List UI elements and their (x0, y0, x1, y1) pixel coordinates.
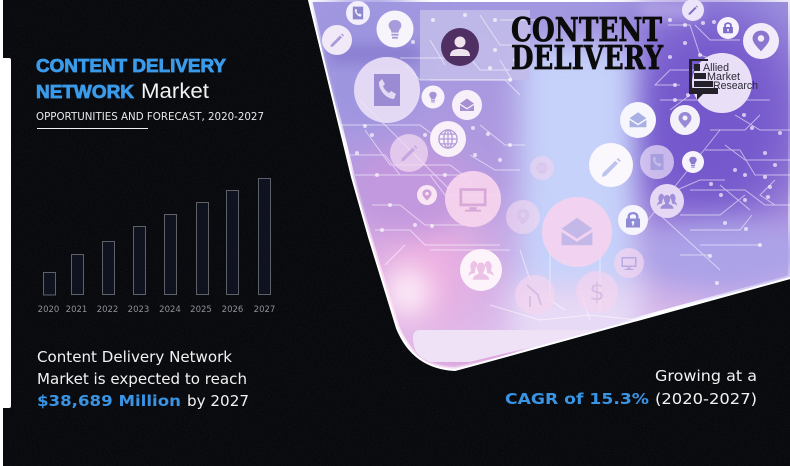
bar chart: 2026 (222, 305, 243, 315)
icon: pencil large white (589, 143, 633, 187)
icon: pencil top right (682, 0, 704, 21)
icon: globe behind logo (692, 53, 752, 113)
icon: envelope (452, 90, 482, 120)
market size callout (37, 348, 249, 410)
logo: Allied Market Research: Allied (703, 62, 729, 74)
tablet (413, 330, 600, 362)
icon: envelope large (542, 197, 612, 267)
icon: user (441, 28, 479, 66)
icon: globe (430, 121, 466, 157)
icon: pin right (670, 105, 700, 135)
icon: pin top right (743, 23, 779, 59)
photo heading: content delivery: CONTENT (511, 10, 662, 49)
circuit nodes (355, 13, 782, 285)
bar chart: 2024 (159, 305, 181, 315)
icon: chart faded (515, 275, 555, 315)
icon: envelope right (620, 102, 656, 138)
icon: people right (650, 184, 684, 218)
market size callout: Content Delivery Network (37, 348, 232, 366)
hero photo panel (310, 0, 790, 369)
white left edge strip (0, 0, 11, 466)
icon: phone small (346, 1, 370, 25)
photo colour washes (310, 0, 790, 365)
bar chart: 2025 (190, 305, 212, 315)
icon: monitor faded (614, 248, 644, 278)
market size callout: $38,689 Million (37, 392, 181, 410)
icon: bulb right (682, 151, 704, 173)
icon: pin faded (506, 200, 540, 234)
title (36, 56, 226, 103)
CAGR callout: (2020-2027) (655, 390, 757, 408)
title: NETWORK (36, 82, 134, 102)
market size callout: Market is expected to reach (37, 370, 247, 388)
icon: phone book (354, 57, 420, 123)
icon: pencil faded (390, 134, 428, 172)
icon: bulb small (422, 86, 444, 108)
bar chart (38, 178, 275, 315)
CAGR callout (505, 367, 757, 408)
icon: dollar faded: $ (589, 278, 605, 306)
icon: lock right (618, 205, 648, 235)
bar chart: 2022 (97, 305, 118, 315)
icon: globe faded (530, 156, 554, 180)
icon: pin small left (417, 185, 437, 205)
icon: dollar faded (576, 271, 618, 313)
bar chart: 2023 (128, 305, 149, 315)
icon: pencil (322, 25, 352, 55)
bar chart: 2021 (66, 305, 87, 315)
CAGR callout: Growing at a (655, 367, 757, 385)
title: CONTENT DELIVERY (36, 56, 226, 76)
logo: Allied Market Research: Research (713, 80, 758, 92)
logo: Allied Market Research (689, 59, 758, 100)
CAGR callout: CAGR of 15.3% (505, 390, 650, 408)
title underline (37, 128, 148, 129)
icon: monitor (445, 171, 501, 227)
title: Market (141, 80, 209, 103)
icon: bulb (376, 10, 414, 48)
photo heading: content delivery: DELIVERY (511, 38, 663, 77)
bar chart: 2027 (254, 305, 275, 315)
icon: people (460, 249, 502, 291)
market size callout: by 2027 (187, 392, 249, 410)
logo: Allied Market Research: Market (707, 71, 740, 83)
circuit traces (340, 15, 790, 320)
icon: lock top right (717, 17, 739, 39)
icon: phone faded (640, 145, 674, 179)
photo heading: content delivery (511, 10, 663, 77)
subtitle: OPPORTUNITIES AND FORECAST, 2020-2027 (36, 111, 264, 123)
bar chart: 2020 (38, 305, 59, 315)
